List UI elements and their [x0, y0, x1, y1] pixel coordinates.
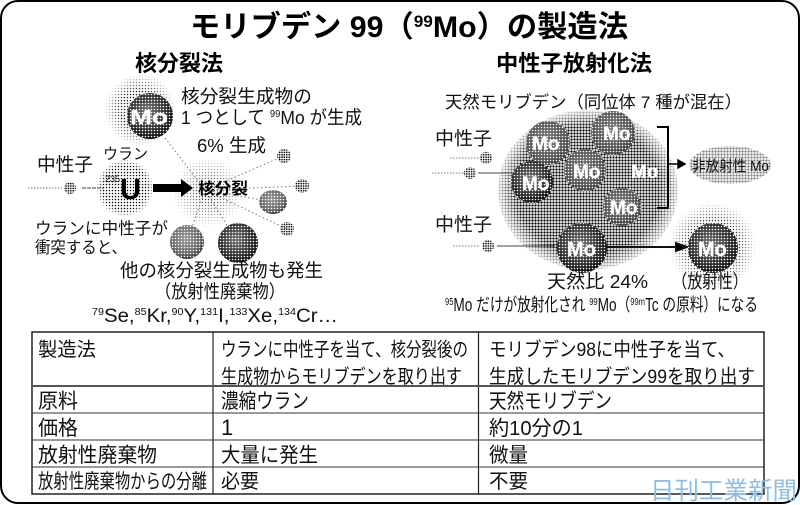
text: other products: 79 — [92, 307, 104, 318]
natural molybdenum cloud — [498, 110, 678, 270]
fission burst with rays — [164, 138, 302, 229]
molybdenum 99 atom — [104, 74, 176, 146]
title: Mo — [433, 11, 477, 44]
text: 99Mo generated: 99 — [270, 109, 281, 120]
label: neutron upper: 中性子 — [435, 128, 492, 149]
Mo atoms: Mo — [573, 162, 600, 183]
row: price — [38, 415, 583, 440]
caption: 99m — [630, 297, 645, 308]
text: other products — [92, 260, 338, 327]
arrow: activation — [606, 243, 687, 251]
caption: Mo（ — [598, 295, 630, 315]
title: ）の製造法 — [477, 11, 627, 44]
text: 99Mo generated: 1 つとして — [181, 107, 270, 128]
label: radioactive: （放射性） — [672, 271, 748, 292]
text: other products: （放射性廃棄物） — [155, 281, 285, 302]
99Mo atom: Mo — [698, 239, 727, 261]
row: separation — [38, 470, 528, 493]
row: price: 1 — [221, 415, 233, 440]
row: price: 価格 — [38, 417, 78, 440]
text: other products: Xe, — [247, 306, 278, 327]
caption: Tc の原料）になる — [645, 295, 758, 315]
row: radioactive waste: 大量に発生 — [221, 444, 318, 467]
row: method: 製造法 — [38, 339, 96, 361]
text: other products: 85 — [135, 307, 147, 318]
label: neutron: 中性子 — [37, 154, 93, 175]
row: raw material: 天然モリブデン — [489, 389, 612, 413]
text: natural molybdenum: 天然モリブデン（同位体 7 種が混在） — [445, 92, 742, 112]
text: collision — [35, 219, 168, 257]
row: method: 生成物からモリブデンを取り出す — [221, 365, 462, 388]
arrow to non-radioactive — [668, 160, 685, 168]
text: other products: Se, — [104, 306, 135, 327]
text: other products: Cr… — [296, 306, 338, 327]
uranium atom: 235 — [105, 174, 120, 184]
row: radioactive waste: 放射性廃棄物 — [38, 444, 157, 467]
98Mo atom: Mo — [567, 239, 596, 261]
row: price: 約10分の1 — [489, 417, 583, 440]
text: 99Mo generated: Mo が生成 — [280, 107, 362, 128]
title: 99 — [414, 12, 433, 31]
row: method: モリブデン98に中性子を当て、 — [489, 338, 735, 361]
caption: 95 — [445, 297, 454, 308]
diagram: nuclear fission — [28, 74, 309, 263]
non-radioactive Mo: 非放射性 Mo — [692, 158, 769, 175]
diagram: neutron activation — [432, 110, 771, 290]
fission products — [170, 149, 309, 263]
uranium atom: U — [120, 174, 141, 206]
row: method — [38, 338, 755, 388]
row: radioactive waste — [38, 444, 528, 467]
comparison table — [32, 332, 764, 494]
caption: Mo だけが放射化され — [453, 295, 589, 315]
neutron — [28, 182, 104, 194]
molybdenum 99 atom: Mo — [130, 107, 168, 129]
text: other products: 134 — [278, 307, 296, 318]
heading: neutron activation method: 中性子放射化法 — [496, 51, 652, 76]
row: separation: 不要 — [489, 471, 528, 493]
uranium atom — [97, 160, 153, 216]
Mo atoms: Mo — [532, 134, 559, 155]
row: method: ウランに中性子を当て、核分裂後の — [221, 339, 468, 361]
98Mo atom — [557, 223, 607, 273]
text: 6 percent: 6% 生成 — [197, 135, 266, 156]
row: raw material: 濃縮ウラン — [221, 390, 309, 413]
halo: radioactive atom — [669, 202, 757, 290]
row: separation: 放射性廃棄物からの分離 — [38, 470, 207, 493]
caption: 99 — [589, 297, 598, 308]
text: 99Mo generated — [181, 86, 362, 128]
text: other products: Kr, — [147, 306, 172, 327]
row: method: 生成したモリブデン99を取り出す — [489, 365, 755, 388]
text: 99Mo generated: 核分裂生成物の — [181, 86, 312, 107]
label: fission: 核分裂 — [198, 179, 248, 198]
watermark: 日刊工業新聞 — [650, 477, 797, 505]
text: other products: 131 — [200, 307, 219, 318]
Mo atoms: Mo — [522, 174, 549, 195]
text: other products: 他の核分裂生成物も発生 — [120, 260, 323, 281]
non-radioactive Mo — [689, 146, 771, 184]
text: other products: Y, — [184, 306, 200, 327]
text: collision: 衝突すると、 — [35, 238, 127, 257]
row: raw material — [38, 389, 612, 413]
row: radioactive waste: 微量 — [489, 444, 528, 467]
Mo atoms: Mo — [603, 124, 630, 145]
text: collision: ウランに中性子が — [35, 219, 168, 238]
text: other products: I, — [218, 306, 229, 327]
title: モリブデン 99（ — [190, 11, 412, 44]
text: other products: 133 — [229, 307, 248, 318]
label: neutron lower: 中性子 — [435, 214, 492, 235]
heading: fission method: 核分裂法 — [135, 51, 223, 76]
row: separation: 必要 — [221, 470, 259, 493]
row: raw material: 原料 — [38, 390, 78, 413]
99Mo atom — [688, 223, 738, 273]
label: natural ratio: 天然比 24% — [547, 271, 648, 292]
Mo atoms — [511, 111, 658, 226]
Mo atoms: Mo — [631, 162, 658, 183]
Mo atoms: Mo — [610, 198, 637, 219]
arrow to fission — [153, 179, 193, 197]
neutrons — [432, 152, 555, 252]
text: other products: 90 — [172, 307, 184, 318]
label: uranium: ウラン — [103, 145, 148, 163]
bracket — [657, 127, 668, 208]
